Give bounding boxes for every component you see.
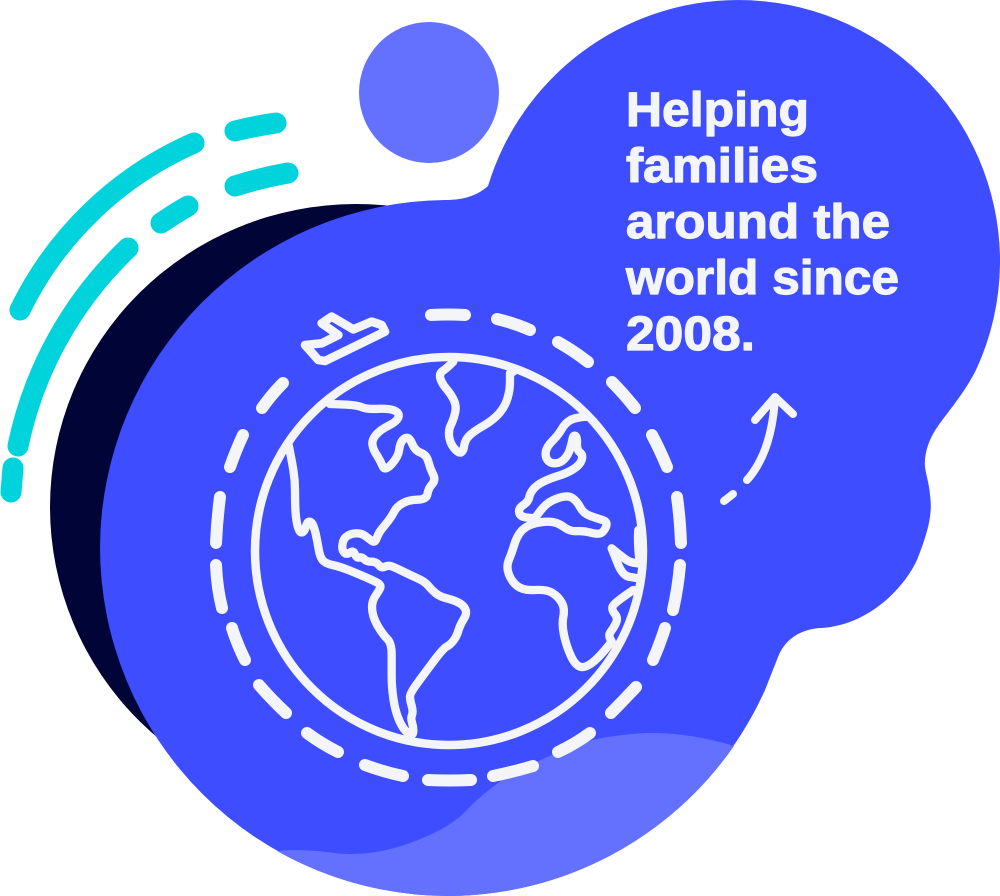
- icon: airplane: [305, 317, 385, 361]
- arabia and east africa outline: [609, 530, 640, 642]
- americas outline: [288, 404, 466, 735]
- greenland outline: [440, 362, 513, 453]
- dark navy circle behind blob: [50, 204, 662, 810]
- europe and africa outline: [507, 417, 612, 667]
- heading text: Helping: [626, 84, 809, 137]
- teal motion dashes: [11, 123, 288, 492]
- light wave at blob bottom: [277, 733, 734, 896]
- heading text: [625, 84, 899, 361]
- icon: globe: [255, 357, 643, 745]
- heading text: world since: [625, 252, 899, 305]
- heading text: 2008.: [626, 308, 755, 361]
- dashed orbit ring: [216, 314, 681, 780]
- arrow pointing to heading: [724, 397, 793, 501]
- heading text: around the: [626, 196, 890, 249]
- small light blue circle: [359, 22, 499, 163]
- heading text: families: [626, 140, 818, 193]
